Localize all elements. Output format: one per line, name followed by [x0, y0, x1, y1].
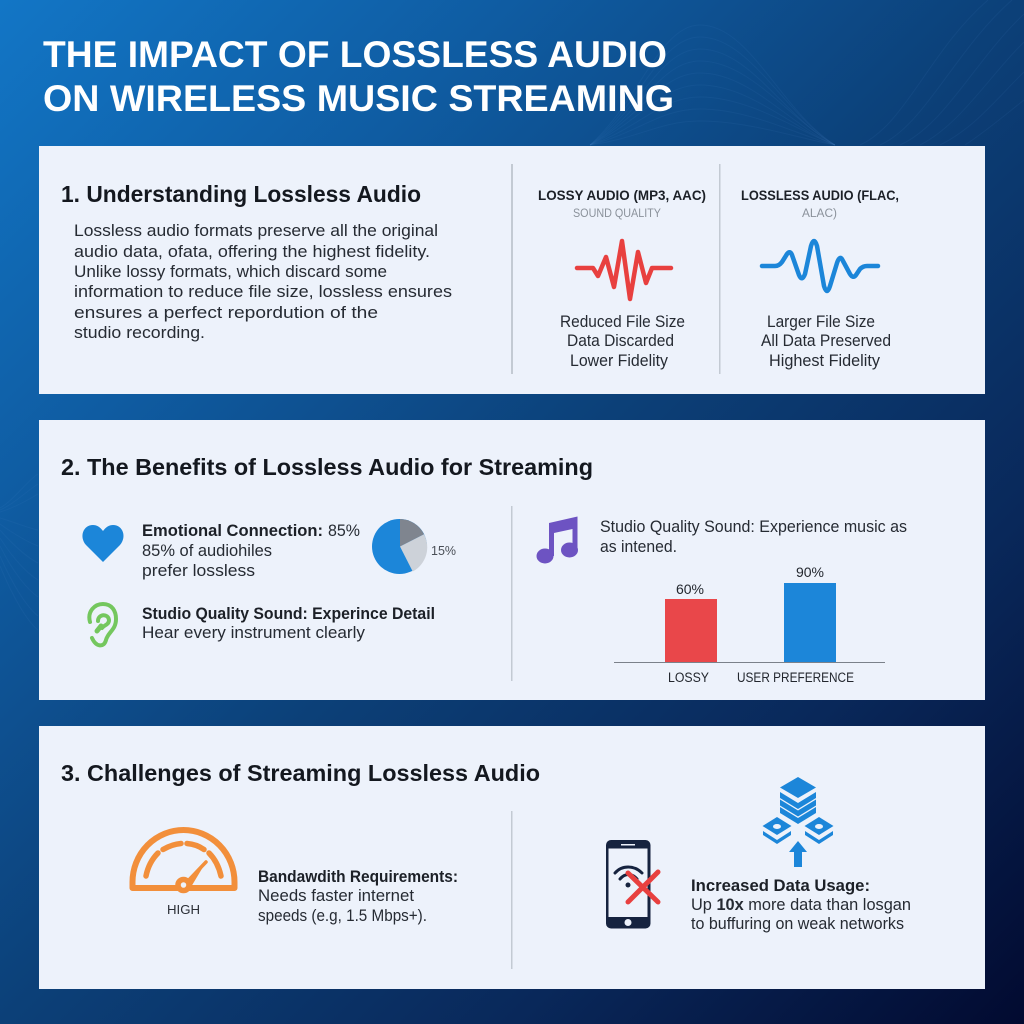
emotional connection text: Emotional Connection:	[142, 522, 323, 540]
icon: lossy waveform	[577, 241, 671, 299]
bar chart: USER PREFERENCE	[737, 670, 854, 685]
lossless audio column: ALAC)	[802, 208, 837, 220]
lossy audio column: Data Discarded	[567, 332, 674, 350]
icon: speedometer gauge	[132, 830, 234, 917]
panel: benefits for streaming	[39, 420, 985, 700]
lossless audio column: Larger File Size	[767, 313, 875, 331]
studio quality text: Studio Quality Sound: Experince Detail	[142, 605, 435, 623]
body text: lossless description: audio data, ofata, offering the highest fidelity.	[74, 243, 430, 261]
body text: lossless description: information to reduce file size, lossless ensures	[74, 283, 452, 301]
panel: understanding lossless audio	[39, 146, 985, 394]
emotional connection text: 85% of audiohiles	[142, 542, 272, 560]
panel: challenges of streaming	[39, 726, 985, 989]
studio quality text: Hear every instrument clearly	[142, 624, 366, 642]
lossless audio column	[741, 188, 899, 370]
lossless audio column: All Data Preserved	[761, 332, 891, 350]
studio quality text	[142, 605, 435, 642]
studio quality description: Studio Quality Sound: Experience music as	[600, 518, 907, 536]
bandwidth text: Bandawdith Requirements:	[258, 868, 458, 886]
emotional connection text: 85%	[328, 522, 360, 540]
title	[43, 34, 674, 119]
icon: phone with no wifi	[606, 840, 658, 928]
lossless audio column: Highest Fidelity	[769, 352, 881, 370]
title: THE IMPACT OF LOSSLESS AUDIO	[43, 34, 667, 75]
body text: lossless description: Lossless audio formats preserve all the original	[74, 222, 438, 240]
data usage text: to buffuring on weak networks	[691, 915, 904, 933]
lossy audio column: LOSSY AUDIO (MP3, AAC)	[538, 188, 706, 203]
emotional connection text	[142, 522, 360, 580]
pie chart: 15%	[431, 544, 456, 558]
bandwidth text: speeds (e.g, 1.5 Mbps+).	[258, 907, 427, 925]
bar chart: 60%	[676, 581, 704, 597]
icon: ear	[89, 604, 116, 645]
lossy audio column: Reduced File Size	[560, 313, 685, 331]
heading: section 1: 1. Understanding Lossless Audio	[61, 181, 421, 207]
body text: lossless description: ensures a perfect repordution of the	[74, 304, 378, 322]
bar chart: LOSSY	[668, 670, 709, 685]
body text: lossless description: Unlike lossy formats, which discard some	[74, 263, 387, 281]
icon: data stack with up arrow	[762, 777, 834, 867]
title: ON WIRELESS MUSIC STREAMING	[43, 78, 674, 119]
icon: heart	[82, 525, 124, 562]
lossy audio column: Lower Fidelity	[570, 352, 669, 370]
icon: lossless waveform	[762, 241, 878, 291]
data usage text: Up 10x more data than losgan	[691, 896, 911, 914]
bar chart	[614, 564, 885, 685]
studio quality description: as intened.	[600, 538, 677, 556]
bandwidth text: Needs faster internet	[258, 887, 414, 905]
data usage text: Increased Data Usage:	[691, 877, 870, 895]
icon: speedometer gauge: HIGH	[167, 903, 200, 917]
heading: section 3: 3. Challenges of Streaming Lossless Audio	[61, 760, 540, 786]
pie chart	[372, 519, 456, 574]
emotional connection text: prefer lossless	[142, 562, 255, 580]
bar chart: 90%	[796, 564, 824, 580]
lossy audio column	[538, 188, 706, 370]
bandwidth text	[258, 868, 458, 925]
lossless audio column: LOSSLESS AUDIO (FLAC,	[741, 188, 899, 203]
lossy audio column: SOUND QUALITY	[573, 208, 661, 220]
icon: music note	[536, 516, 578, 564]
body text: lossless description: studio recording.	[74, 324, 205, 342]
heading: section 2: 2. The Benefits of Lossless Audio for Streaming	[61, 454, 593, 480]
data usage text	[691, 877, 911, 933]
studio quality description	[600, 518, 907, 556]
body text: lossless description	[74, 222, 452, 342]
